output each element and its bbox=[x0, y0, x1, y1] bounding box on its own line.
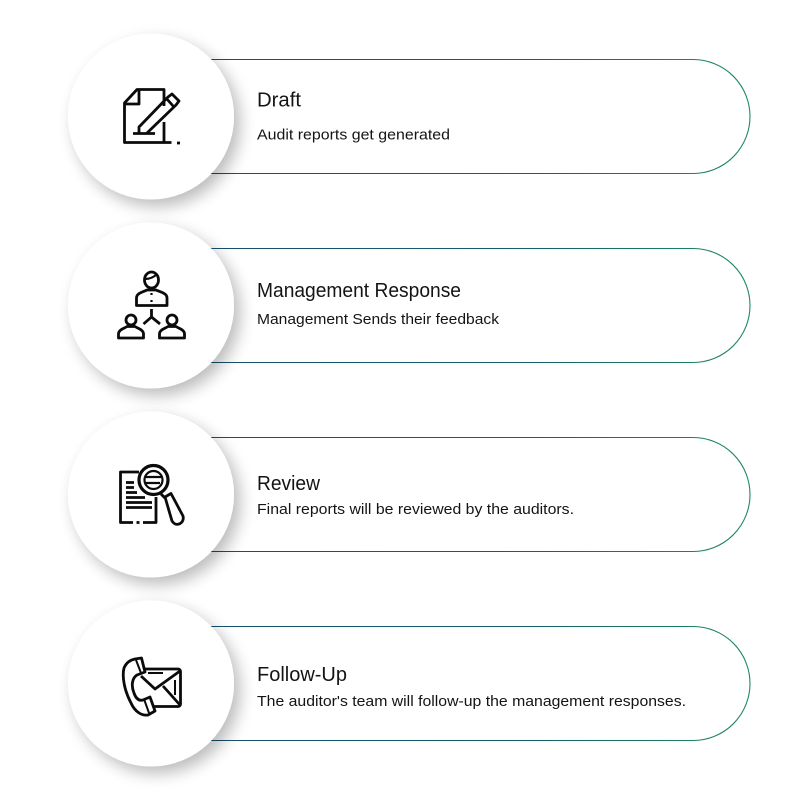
heading: Follow-Up: Follow-Up bbox=[257, 663, 347, 686]
icon: team hierarchy bbox=[118, 272, 184, 338]
icon: document with magnifier bbox=[120, 466, 183, 524]
icon circle: Review bbox=[68, 412, 234, 578]
icon circle: Management Response bbox=[68, 222, 234, 388]
pill outline: Follow-Up bbox=[150, 626, 750, 740]
icon circle: Draft bbox=[68, 34, 234, 200]
panel: Review step bbox=[68, 412, 750, 578]
pill outline: Management Response bbox=[150, 248, 750, 362]
text: Draft description: Audit reports get generated bbox=[257, 126, 450, 144]
icon: phone and envelope bbox=[123, 658, 180, 715]
heading: Draft: Draft bbox=[257, 88, 301, 112]
heading: Review: Review bbox=[257, 472, 320, 495]
text: Management Response description: Management Sends their feedback bbox=[257, 311, 500, 328]
text: Review description: Final reports will be reviewed by the auditors. bbox=[257, 501, 574, 518]
pill outline: Draft bbox=[150, 60, 750, 174]
text: Follow-Up description: The auditor's team will follow-up the management responses. bbox=[257, 693, 686, 710]
heading: Management Response: Management Response bbox=[257, 279, 461, 302]
icon: document with pencil bbox=[124, 90, 180, 143]
panel: Management Response step bbox=[68, 222, 750, 388]
icon circle: Follow-Up bbox=[68, 600, 234, 766]
panel: Draft step bbox=[68, 34, 750, 200]
pill outline: Review bbox=[150, 438, 750, 552]
panel: Follow-Up step bbox=[68, 600, 750, 766]
